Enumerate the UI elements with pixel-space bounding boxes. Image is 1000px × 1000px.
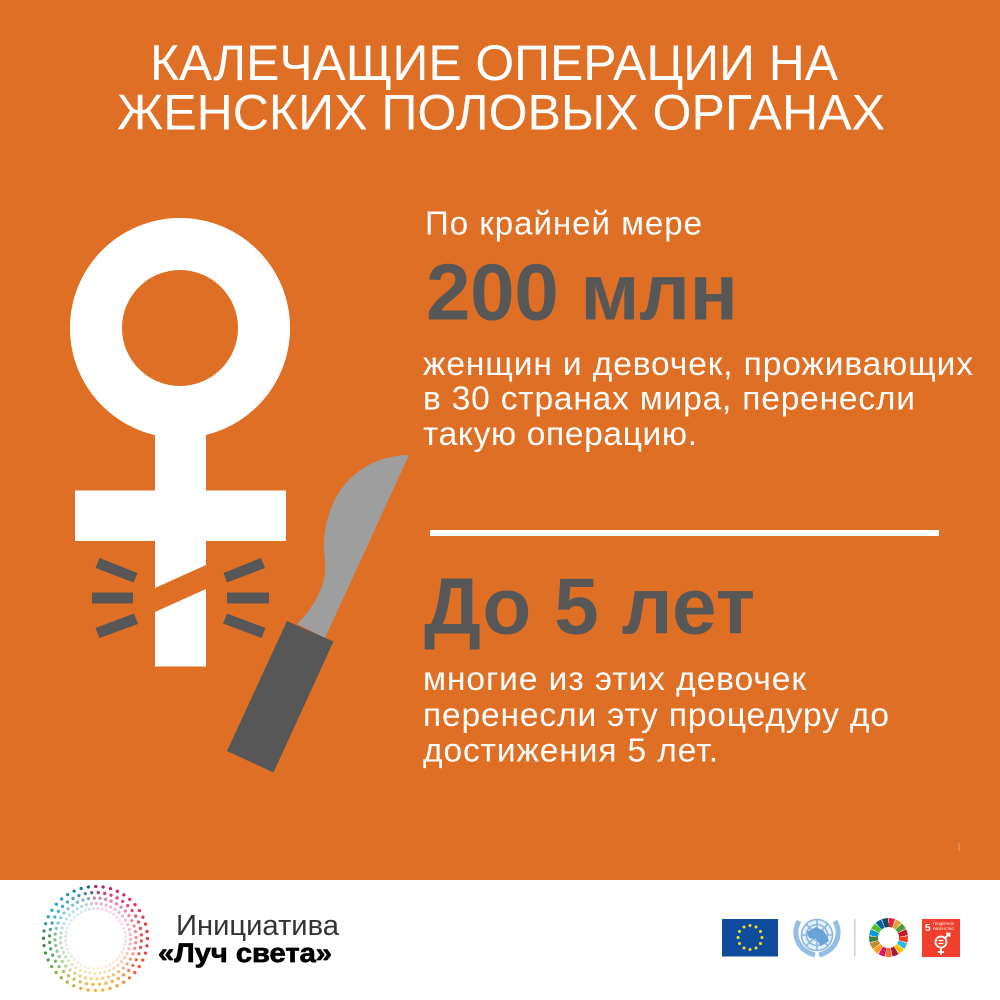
big number: up to 5 years: До 5 лет [424,562,755,650]
icon: SDG 5 gender equality: РАВЕНСТВО [933,927,954,931]
text: intro line: По крайней мере [425,204,702,242]
icon: scalpel [227,455,409,772]
panel: white footer [0,880,1000,1000]
text: description of age: достижения 5 лет. [423,732,718,770]
logo text: Initiative: Инициатива [176,910,340,942]
big number: 200 million: 200 млн [426,248,738,336]
text: description of age: перенесли эту процедуру до [423,697,889,734]
text: description of 200 million: в 30 странах мира, перенесли [423,380,915,418]
icon: SDG 5 gender equality: ГЕНДЕРНОЕ [933,922,955,926]
title [117,35,885,140]
icon: SDG 5 gender equality: 5 [925,923,931,934]
icon: pain marks right [223,558,269,638]
title: ЖЕНСКИХ ПОЛОВЫХ ОРГАНАХ [117,84,885,140]
divider line [430,530,939,536]
icon: UN emblem [796,919,838,955]
icon: female symbol with cut [70,218,290,666]
icon: EU flag [722,919,778,956]
text: description of age: многие из этих девочек [423,661,806,698]
text: description of 200 million: такую операцию. [423,416,697,453]
text: description of 200 million [423,346,973,453]
divider: logos [854,919,856,956]
logo text: Spotlight: «Луч света» [158,938,332,968]
icon: pain marks left [92,558,138,638]
text: description of age [423,661,889,770]
icon: SDG wheel [869,918,908,957]
title: КАЛЕЧАЩИЕ ОПЕРАЦИИ НА [150,35,839,91]
icon: SDG 5 gender equality [922,919,960,957]
icon: Spotlight dotted circle logo [42,884,150,992]
text: description of 200 million: женщин и девочек, проживающих [423,346,973,383]
